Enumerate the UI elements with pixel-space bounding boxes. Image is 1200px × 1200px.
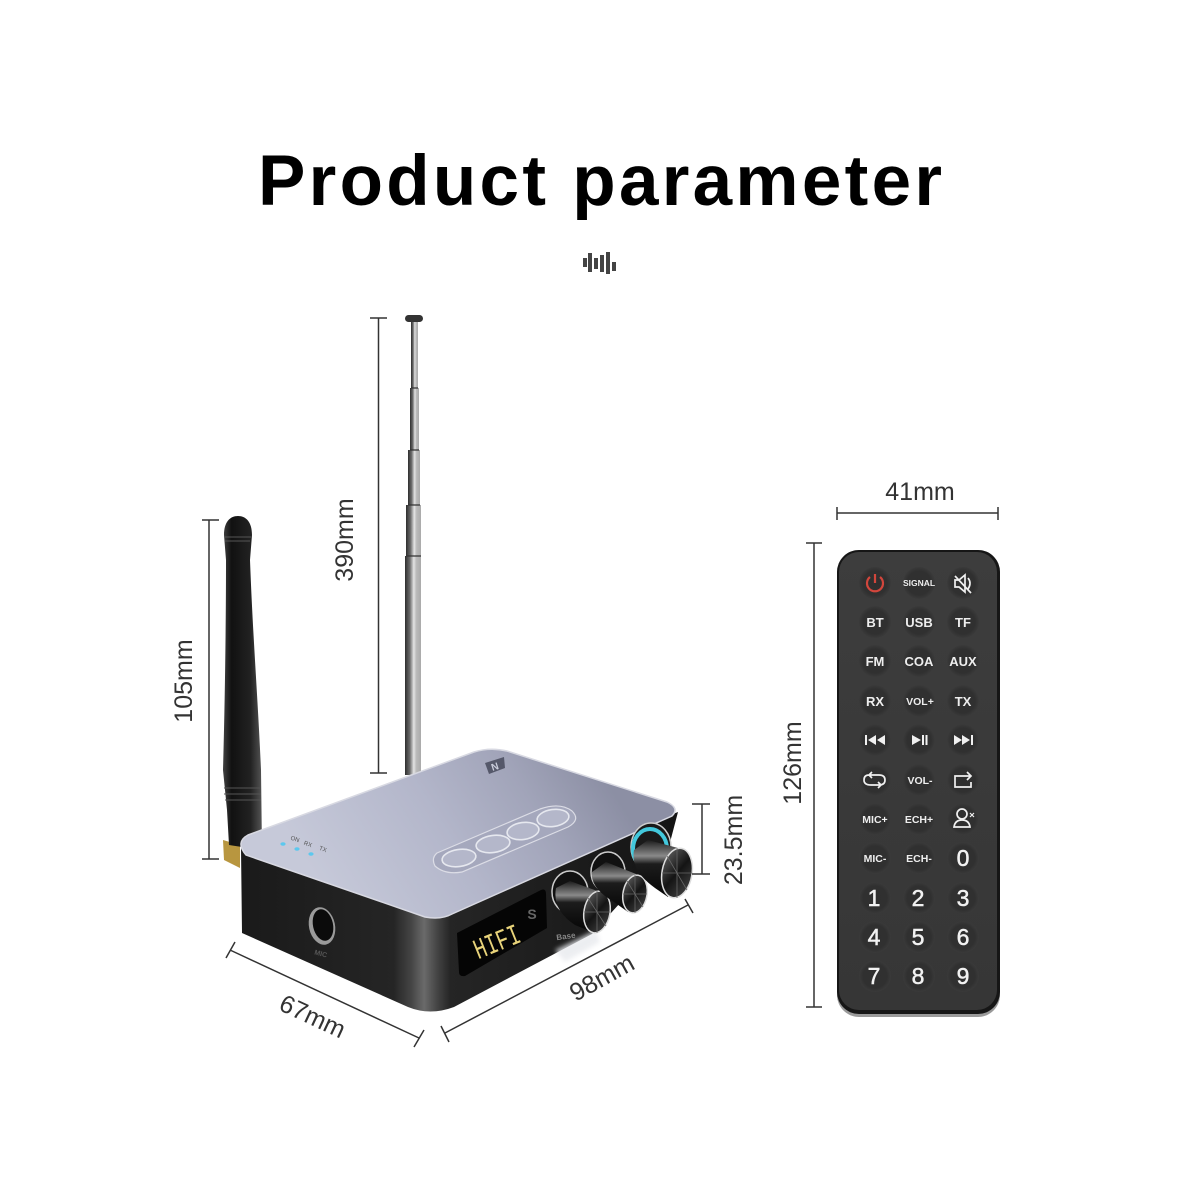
remote digits: 9	[957, 963, 969, 989]
dimension: 126mm	[779, 543, 822, 1007]
status LEDs	[280, 836, 327, 856]
icon: next	[954, 735, 973, 745]
remote labels: MIC-	[864, 853, 887, 865]
dimension: 67mm: 67mm	[275, 989, 350, 1044]
icon: repeat loop	[864, 772, 885, 788]
remote digits: 4	[868, 924, 881, 950]
remote labels: ECH+	[905, 814, 933, 826]
dimension: 67mm	[226, 942, 424, 1047]
mic jack	[305, 905, 339, 959]
dimension: 105mm	[170, 520, 219, 859]
remote labels: ECH-	[906, 853, 932, 865]
top buttons	[433, 806, 576, 873]
remote labels	[862, 615, 977, 865]
remote labels: BT	[866, 615, 884, 630]
remote labels: TX	[955, 694, 972, 709]
remote digits: 3	[957, 885, 969, 911]
dimension: 41mm: 41mm	[885, 478, 955, 506]
dimension: 390mm	[331, 318, 387, 773]
NFC mark	[485, 757, 505, 774]
remote digits: 8	[912, 963, 924, 989]
icon: previous	[865, 735, 885, 745]
remote labels: TF	[955, 615, 971, 630]
rubber antenna	[223, 516, 262, 868]
icon: power	[867, 574, 883, 591]
mic jack: MIC	[314, 949, 328, 959]
remote labels: COA	[905, 654, 934, 669]
remote digits: 2	[912, 885, 924, 911]
remote labels: VOL+	[906, 696, 934, 708]
remote labels: AUX	[949, 654, 977, 669]
dimension: 126mm: 126mm	[779, 721, 807, 805]
remote digits: 6	[957, 924, 969, 950]
dimension: 23.5mm: 23.5mm	[720, 795, 748, 885]
remote shell	[837, 550, 1000, 1017]
front panel reflection	[555, 930, 600, 962]
remote digits	[868, 845, 969, 989]
receiver device	[241, 749, 696, 1012]
knob: volume with cyan ring	[631, 823, 696, 900]
LED display: HIFI	[469, 919, 526, 968]
button wells	[859, 567, 979, 992]
knob: bass	[552, 871, 613, 935]
remote control	[837, 550, 1000, 1017]
top plate	[241, 749, 675, 918]
signal label: SIGNAL	[903, 578, 935, 588]
LED display	[457, 890, 547, 976]
icon: share arrow	[955, 772, 971, 787]
LED display: S	[527, 906, 537, 922]
remote labels: FM	[866, 654, 884, 669]
remote digits: 0	[957, 845, 969, 871]
remote digits: 1	[868, 885, 880, 911]
dimension: 41mm	[837, 478, 998, 520]
dimension: 390mm: 390mm	[331, 498, 359, 582]
dimension: 105mm: 105mm	[170, 639, 198, 723]
telescopic antenna	[405, 315, 423, 775]
knob label: Base	[556, 931, 577, 942]
remote labels: USB	[905, 615, 933, 630]
knob: treble	[591, 852, 650, 915]
device body	[241, 812, 678, 1012]
dimension: 98mm	[441, 899, 693, 1042]
icon: play pause	[912, 735, 928, 745]
title: Product parameter	[258, 142, 942, 221]
NFC mark: N	[490, 761, 500, 774]
remote labels: VOL-	[907, 775, 933, 787]
remote labels: RX	[866, 694, 884, 709]
remote digits: 7	[868, 963, 880, 989]
remote digits: 5	[912, 924, 924, 950]
dimension: 98mm: 98mm	[565, 949, 639, 1007]
icon: vocal cut	[954, 809, 974, 827]
icon: mute	[955, 575, 971, 593]
dimension: 23.5mm	[692, 795, 748, 885]
remote labels: MIC+	[862, 814, 888, 826]
status LEDs: ON	[289, 836, 300, 844]
status LEDs: RX	[303, 841, 313, 849]
status LEDs: TX	[318, 846, 327, 854]
icon: sound wave	[583, 252, 616, 274]
